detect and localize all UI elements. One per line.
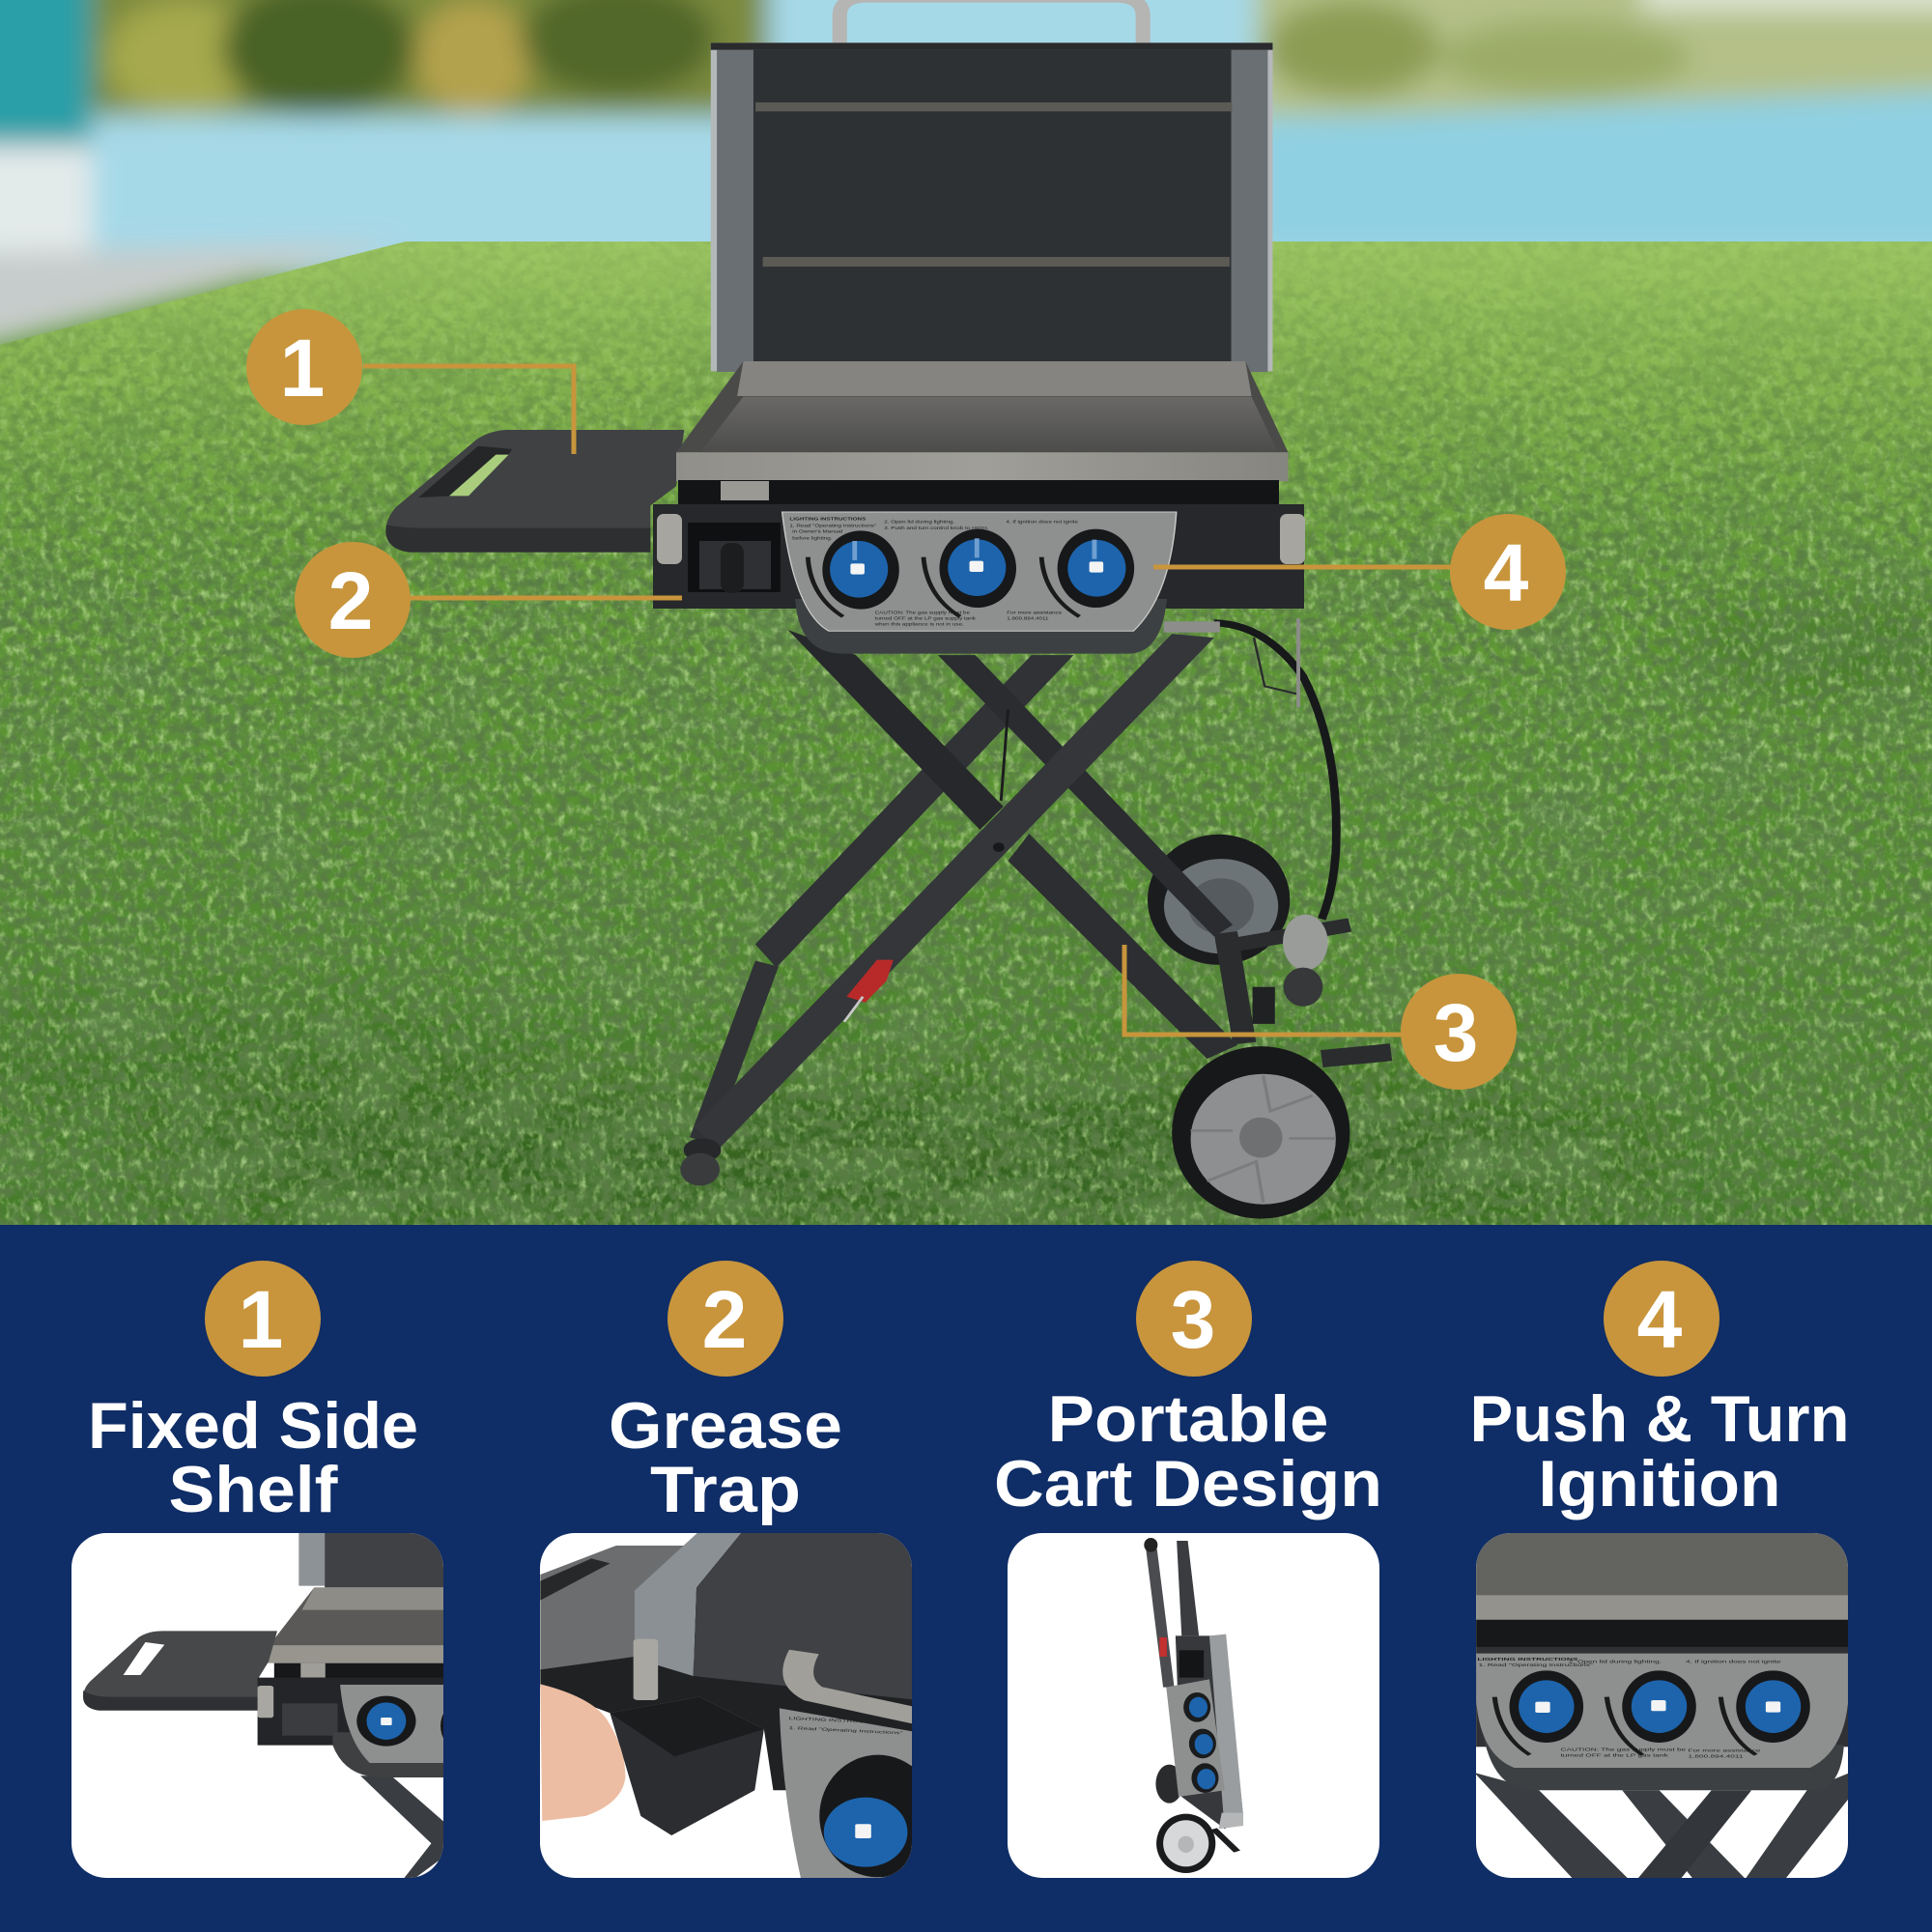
feature 1: fixed side shelf: 1 xyxy=(239,1274,283,1365)
latches xyxy=(657,514,682,564)
feature 4: push and turn ignition: 4 xyxy=(1637,1274,1683,1365)
callout 1: leader line and badge xyxy=(246,309,574,454)
feature 3: portable cart design: Portable xyxy=(1047,1382,1329,1456)
control panel with three knobs: For more assistance xyxy=(1007,611,1062,615)
side shelf xyxy=(385,430,684,553)
feature 3: portable cart design: 3 xyxy=(1171,1274,1215,1365)
thumbnail: ignition knobs photo: 1. Read "Operating Instructions" xyxy=(1479,1663,1594,1667)
thumbnail: grease trap photo: LIGHTING INSTRUCTIONS xyxy=(788,1717,890,1725)
control panel with three knobs: 4. If ignition does not ignite xyxy=(1006,520,1078,525)
front struts xyxy=(1009,834,1237,1059)
blurred building and trees backdrop xyxy=(0,0,1932,353)
feature 3: portable cart design: Cart Design xyxy=(994,1447,1382,1520)
gas hose xyxy=(1214,623,1336,919)
red lock latch xyxy=(846,960,894,1003)
small knob 1 xyxy=(1494,1670,1583,1755)
thumbnail: ignition knobs photo: CAUTION: The gas supply must be xyxy=(1560,1747,1687,1752)
feature 2: grease trap: Trap xyxy=(650,1453,801,1526)
small knob 3 xyxy=(1720,1670,1810,1755)
feature 4: push and turn ignition: Push & Turn xyxy=(1470,1382,1849,1456)
control panel with three knobs: in Owner's Manual xyxy=(792,529,842,534)
wheel axle and upright xyxy=(1237,924,1350,945)
control panel with three knobs: 1. Read "Operating Instructions" xyxy=(789,524,876,528)
thumbnail: ignition knobs photo: 1.800.894.4011 xyxy=(1689,1754,1744,1759)
back wheel, folding legs, hose and front wheel xyxy=(680,618,1391,1219)
thumbnail: side shelf photo xyxy=(71,1533,477,1879)
callout 4: leader line and badge xyxy=(1153,514,1566,630)
feature 4: push and turn ignition xyxy=(1470,1261,1852,1879)
thumbnail: grease trap photo xyxy=(540,1531,936,1879)
foot cap xyxy=(684,1138,721,1162)
feature 1: fixed side shelf: Shelf xyxy=(168,1453,338,1526)
back wheel xyxy=(1148,835,1290,965)
callout 2: leader line and badge: 2 xyxy=(328,555,373,646)
small knob 2 xyxy=(1606,1670,1696,1755)
griddle plate xyxy=(676,361,1288,481)
feature 3: portable cart design xyxy=(994,1261,1382,1878)
knob 1 xyxy=(808,530,899,616)
thumbnail: ignition knobs photo: turned OFF at the LP gas tank xyxy=(1560,1753,1669,1758)
control panel with three knobs: LIGHTING INSTRUCTIONS xyxy=(789,517,867,522)
thumbnail: ignition knobs photo: 4. If ignition does not ignite xyxy=(1686,1660,1781,1664)
feature 2: grease trap: Grease xyxy=(609,1389,842,1463)
thumbnail: ignition knobs photo: LIGHTING INSTRUCTIONS xyxy=(1477,1658,1578,1662)
thumbnail: grease trap photo: 1. Read "Operating Instructions" xyxy=(788,1726,904,1736)
regulator xyxy=(1283,915,1328,1007)
feature 2: grease trap xyxy=(540,1261,936,1879)
front wheel xyxy=(1172,1046,1350,1219)
grass blade texture xyxy=(0,242,1932,1225)
open lid with handle xyxy=(711,0,1272,372)
control panel with three knobs: when this appliance is not in use. xyxy=(873,622,964,627)
illustration: griddle on cart xyxy=(385,0,1391,1219)
panel: outdoor photo background xyxy=(0,0,1932,1225)
feature 1: fixed side shelf: Fixed Side xyxy=(88,1389,418,1463)
feature 2: grease trap: 2 xyxy=(702,1274,747,1365)
control panel with three knobs: turned OFF at the LP gas supply tank xyxy=(875,616,976,621)
thumbnail: ignition knobs photo xyxy=(1474,1533,1852,1879)
rear leg tube xyxy=(701,964,767,1140)
callout 3: leader line and badge: 3 xyxy=(1434,987,1478,1078)
thumbnail: folded cart photo xyxy=(1008,1533,1379,1878)
control panel with three knobs: CAUTION: The gas supply must be xyxy=(875,611,970,615)
control panel with three knobs: 1.800.894.4011 xyxy=(1007,616,1049,621)
feature 4: push and turn ignition: Ignition xyxy=(1538,1447,1781,1520)
thumbnail: ignition knobs photo: For more assistance xyxy=(1689,1748,1761,1753)
firebox body xyxy=(653,480,1305,609)
pull handle xyxy=(1321,1052,1391,1059)
hose fitting xyxy=(1164,621,1220,633)
feature 1: fixed side shelf xyxy=(71,1261,477,1879)
callout 4: leader line and badge: 4 xyxy=(1484,527,1529,618)
panel: navy feature strip xyxy=(0,1225,1932,1932)
callout 2: leader line and badge xyxy=(295,542,682,658)
control panel with three knobs xyxy=(782,512,1220,654)
callout 3: leader line and badge xyxy=(1124,945,1517,1090)
thumbnail: ignition knobs photo: 2. Open lid during lighting. xyxy=(1569,1660,1662,1664)
control panel with three knobs: before lighting. xyxy=(792,536,833,541)
lawn xyxy=(0,242,1932,1225)
control panel with three knobs: 3. Push and turn control knob to HIGH. xyxy=(884,526,989,531)
control panel with three knobs: 2. Open lid during lighting. xyxy=(884,520,954,525)
knob 3 xyxy=(1041,529,1134,616)
callout 1: leader line and badge: 1 xyxy=(280,323,325,413)
back struts xyxy=(755,655,1073,968)
knob 2 xyxy=(923,529,1016,616)
